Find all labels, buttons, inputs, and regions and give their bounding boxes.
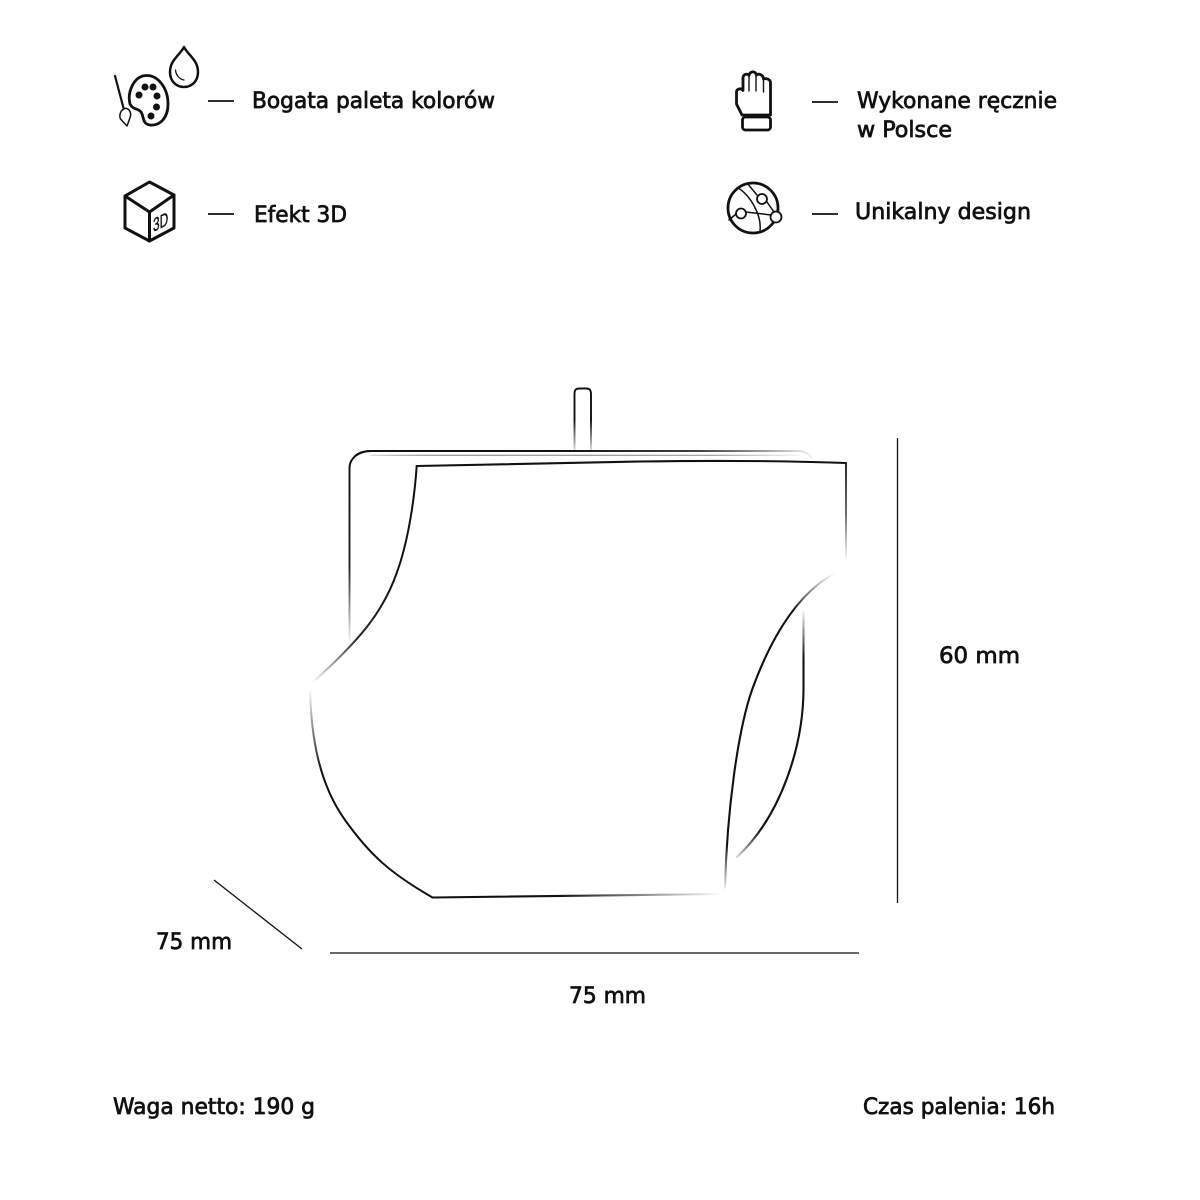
dash — [812, 213, 838, 215]
dash — [208, 213, 234, 215]
wick — [574, 388, 591, 450]
front body top edge — [417, 461, 846, 466]
icon: glove hand — [736, 72, 770, 130]
icon: 3D cube — [125, 182, 174, 241]
label: Wykonane ręcznie w Polsce: w Polsce — [857, 118, 952, 143]
burn time: Czas palenia: 16h — [863, 1095, 1055, 1120]
feature: unique design — [728, 183, 1031, 233]
right inner curve — [725, 573, 835, 888]
icon: palette, brush and drop — [115, 47, 198, 126]
right outer curve — [737, 608, 804, 857]
label: Unikalny design: Unikalny design — [855, 200, 1031, 225]
candle outline drawing — [310, 388, 846, 898]
label: Wykonane ręcznie w Polsce — [857, 89, 1057, 143]
lower left curve — [310, 688, 432, 898]
dimension: depth 75 mm: 75 mm — [156, 930, 232, 955]
icon: 3D cube: 3D — [153, 208, 168, 237]
feature: 3D effect — [125, 182, 347, 241]
net weight: Waga netto: 190 g — [113, 1095, 315, 1120]
dimension: depth 75 mm — [156, 880, 302, 955]
dash — [208, 100, 234, 102]
front right edge — [845, 463, 847, 561]
label: Bogata paleta kolorów: Bogata paleta kolorów — [252, 89, 495, 114]
bottom edge — [432, 894, 722, 898]
back lid outline — [350, 451, 812, 645]
feature: handmade in Poland — [736, 72, 1057, 143]
upper left curve — [312, 466, 417, 683]
dash — [812, 101, 838, 103]
label: Wykonane ręcznie w Polsce: Wykonane ręcznie — [857, 89, 1057, 114]
dimension: height 60 mm: 60 mm — [939, 644, 1020, 669]
label: Efekt 3D: Efekt 3D — [254, 203, 347, 228]
feature: rich colour palette — [115, 47, 495, 126]
icon: globe with nodes — [728, 183, 782, 233]
dimension: width 75 mm: 75 mm — [569, 984, 646, 1009]
